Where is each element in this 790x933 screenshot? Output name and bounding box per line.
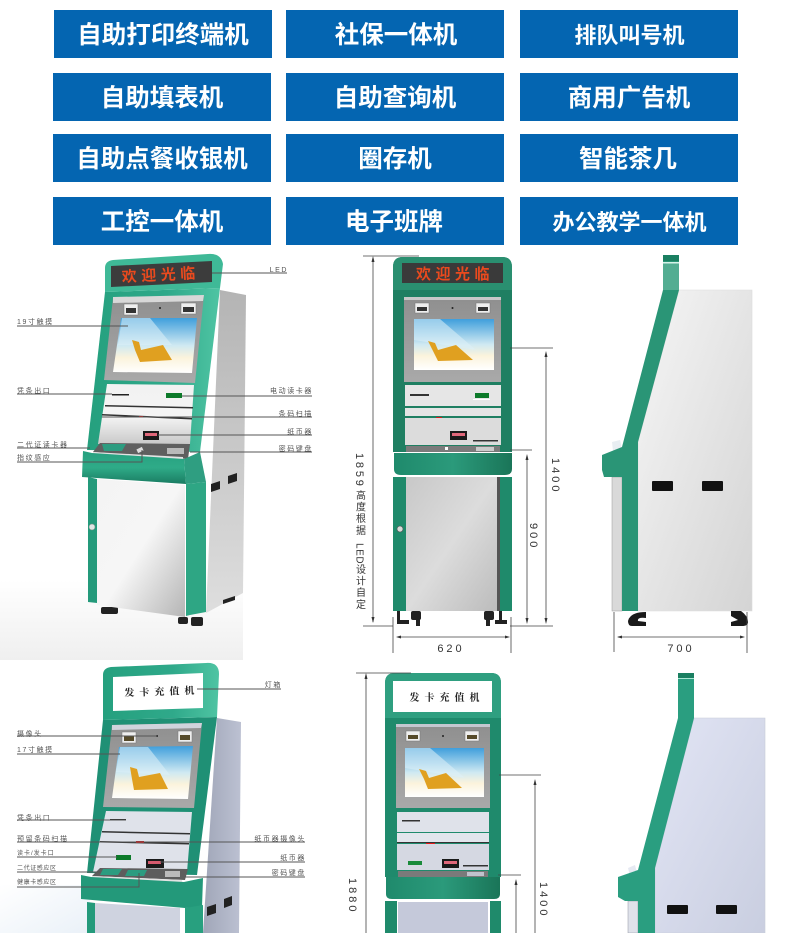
label: LED: LED	[270, 267, 288, 274]
dimension: overall height 1859: 1859	[353, 453, 365, 489]
button: 电子班牌: 电子班牌	[345, 208, 443, 236]
label: 指纹感应: 指纹感应	[17, 453, 51, 462]
right post	[185, 905, 203, 933]
right post	[498, 477, 512, 611]
card reader	[166, 393, 182, 398]
label: 纸币器: 纸币器	[280, 853, 306, 862]
top bar of bezel	[113, 295, 204, 303]
screen bezel	[104, 295, 204, 383]
divider bars	[100, 831, 190, 844]
dimension: overall height 1859: 高度根据	[354, 489, 366, 537]
label: 二代证感应区	[17, 864, 100, 872]
button: 排队叫号机: 排队叫号机	[574, 23, 685, 48]
right post	[490, 901, 501, 933]
button: 商用广告机	[520, 73, 738, 121]
button: 自助查询机: 自助查询机	[334, 84, 457, 112]
label: 预留条码扫描: 预留条码扫描	[17, 834, 69, 843]
label: 纸币器摄像头: 纸币器摄像头	[254, 834, 306, 843]
button: 工控一体机: 工控一体机	[101, 208, 224, 236]
cash acceptor	[146, 859, 164, 868]
dimension: 900	[510, 450, 539, 624]
label: 密码键盘	[185, 868, 306, 877]
door edge	[497, 477, 500, 611]
floor shadow: lower photo	[0, 885, 90, 933]
label: 凭条出口: 凭条出口	[17, 386, 51, 395]
cap highlight	[663, 262, 679, 264]
kiosk B: front elevation	[385, 673, 501, 933]
cameras	[122, 731, 192, 743]
button: 自助填表机: 自助填表机	[101, 84, 224, 112]
side slots	[652, 481, 723, 491]
screen bezel	[396, 724, 490, 808]
dimension: 1400	[499, 775, 549, 933]
label: 健康卡感应区: 健康卡感应区	[17, 878, 57, 886]
label: 密码键盘	[190, 444, 313, 453]
feet	[628, 611, 748, 626]
floor shadow: upper photo	[0, 580, 243, 660]
rear panel	[655, 718, 765, 933]
LED header	[105, 254, 223, 292]
label: 纸币器: 纸币器	[287, 427, 313, 436]
label: 读卡/发卡口	[17, 849, 117, 857]
label: 摄像头	[17, 729, 157, 738]
cash acceptor	[143, 431, 159, 440]
sign panel: 发卡充值机	[124, 684, 200, 699]
scanner panel	[397, 833, 489, 844]
cap highlight	[678, 678, 694, 679]
LED display: 欢迎光临	[416, 265, 494, 283]
door	[97, 479, 185, 617]
label: 凭条出口: 凭条出口	[17, 813, 51, 822]
bezel top bar	[396, 724, 490, 727]
label: 电动读卡器: 电动读卡器	[270, 386, 313, 395]
door	[398, 902, 488, 933]
red scanner	[139, 416, 143, 418]
lower frame left post	[88, 477, 97, 603]
button: 办公教学一体机: 办公教学一体机	[552, 210, 707, 235]
dimension: 1400: 1400	[537, 882, 549, 918]
screen bezel	[103, 723, 202, 808]
label: 预留条码扫描	[17, 834, 144, 843]
side panel	[206, 290, 246, 613]
header cap	[678, 673, 694, 678]
dimension: depth 700	[614, 612, 747, 655]
label: 密码键盘: 密码键盘	[279, 444, 313, 453]
header tint	[385, 673, 501, 718]
body frame	[87, 288, 220, 452]
button: 自助点餐收银机: 自助点餐收银机	[76, 145, 248, 173]
label: 二代证感应区: 二代证感应区	[17, 864, 57, 872]
button: 智能茶几	[520, 134, 738, 182]
label: 凭条出口	[17, 813, 126, 822]
dimensions: kiosk A front	[353, 256, 561, 655]
dimension: 900: 900	[527, 523, 539, 550]
control panel	[93, 811, 192, 872]
receipt slot	[112, 394, 129, 396]
kiosk B: perspective view	[81, 663, 241, 933]
header cap	[663, 255, 679, 261]
side slots	[667, 905, 737, 914]
header	[103, 663, 219, 720]
callouts: kiosk A	[17, 267, 313, 462]
label: 摄像头: 摄像头	[17, 729, 43, 738]
label: 读卡/发卡口: 读卡/发卡口	[17, 849, 55, 857]
header upper tint	[663, 262, 679, 290]
label: 指纹感应	[17, 450, 142, 462]
side panel	[203, 718, 241, 933]
touch screen	[405, 748, 484, 797]
receipt slot	[110, 819, 126, 820]
rear panel	[638, 290, 752, 611]
side slots	[207, 896, 232, 916]
label: 二代证读卡器: 二代证读卡器	[17, 440, 69, 449]
bezel top bar	[112, 723, 202, 730]
shelf	[81, 875, 203, 908]
green profile	[618, 673, 694, 933]
label: 凭条出口	[17, 386, 112, 395]
lower control panel	[98, 384, 194, 444]
feet	[397, 611, 507, 626]
dimension: overall height 1880	[346, 673, 411, 933]
label: 二代证读卡器	[17, 440, 90, 449]
dimension: overall height 1859: LED	[354, 543, 364, 564]
door edge	[612, 477, 622, 611]
kiosk A: side elevation	[602, 255, 752, 626]
touch screen	[113, 318, 197, 373]
button: 社保一体机	[286, 10, 504, 58]
sign panel	[393, 681, 492, 712]
label: 17寸触摸: 17寸触摸	[17, 745, 54, 754]
button: 商用广告机: 商用广告机	[568, 84, 691, 112]
screen bezel	[404, 297, 501, 382]
label: 19寸触摸: 19寸触摸	[17, 317, 54, 326]
label: LED	[212, 267, 288, 274]
shelf	[386, 877, 500, 899]
kiosk A: perspective view	[82, 254, 246, 626]
door	[406, 477, 497, 611]
button: 工控一体机	[53, 197, 271, 245]
label: 19寸触摸	[17, 317, 128, 326]
divider bar	[397, 842, 489, 843]
label: 17寸触摸	[17, 745, 120, 754]
button: 自助打印终端机	[54, 10, 272, 58]
left post	[393, 477, 406, 611]
button: 电子班牌	[286, 197, 504, 245]
red scanner	[136, 841, 144, 843]
counter strip	[398, 871, 488, 877]
cash panel	[397, 844, 489, 870]
dimension: 1400	[510, 348, 561, 626]
cabinet frame	[385, 673, 501, 877]
bezel top bar	[404, 297, 501, 300]
button: 自助填表机	[53, 73, 271, 121]
touch screen	[414, 319, 494, 370]
touch screen	[112, 746, 193, 799]
button: 排队叫号机	[520, 10, 738, 58]
sign panel	[113, 673, 203, 711]
shelf side	[184, 452, 206, 484]
button: 自助点餐收银机	[53, 134, 271, 182]
cameras	[406, 731, 479, 741]
LED display	[402, 263, 503, 283]
cabinet frame	[393, 257, 512, 452]
dimension: overall height 1859: 设计自定	[354, 564, 366, 611]
counter	[92, 868, 188, 882]
door edge	[628, 901, 638, 933]
shelf	[394, 453, 512, 475]
dimension: overall height 1859	[353, 256, 419, 626]
label: 健康卡感应区	[17, 873, 139, 887]
cash panel	[405, 418, 501, 445]
label: 条码扫描: 条码扫描	[279, 409, 313, 418]
kiosk B: side elevation	[618, 673, 765, 933]
LED display	[111, 261, 212, 287]
receipt paper	[612, 440, 622, 451]
panel divider bars	[102, 405, 193, 420]
card reader	[116, 855, 131, 860]
button: 办公教学一体机	[520, 197, 738, 245]
dimension: 900 leader	[498, 875, 521, 933]
dimension: depth 700: 700	[667, 643, 695, 655]
receipt and card panel	[405, 385, 501, 406]
button: 自助打印终端机: 自助打印终端机	[77, 21, 249, 49]
label: 灯箱: 灯箱	[265, 680, 282, 689]
label: 密码键盘: 密码键盘	[272, 868, 306, 877]
left post	[87, 902, 95, 933]
scanner panel	[405, 408, 501, 418]
feet	[101, 596, 235, 626]
callouts: kiosk B	[17, 680, 306, 887]
button: 社保一体机: 社保一体机	[335, 21, 458, 49]
dimension: width 620: 620	[437, 643, 465, 655]
cameras	[124, 303, 196, 315]
dimension: width 620	[393, 617, 511, 655]
sign panel: 发卡充值机	[410, 691, 484, 704]
counter strip	[406, 446, 500, 452]
shelf	[82, 451, 186, 484]
label: 灯箱	[197, 680, 282, 689]
LED display: 欢迎光临	[121, 264, 200, 286]
label: 电动读卡器	[182, 386, 313, 396]
left post	[385, 901, 397, 933]
lock	[89, 524, 95, 530]
cameras	[415, 303, 490, 313]
button: 智能茶几: 智能茶几	[579, 145, 677, 173]
lower frame right post	[186, 482, 206, 616]
side ventilation slots	[211, 473, 237, 492]
dimension: 1400: 1400	[549, 458, 561, 494]
kiosk A: front elevation	[393, 257, 512, 626]
receipt panel	[397, 812, 489, 832]
lock	[397, 526, 403, 532]
button: 自助查询机	[286, 73, 504, 121]
dimension: overall height 1880: 1880	[346, 878, 358, 914]
header tint	[393, 257, 512, 290]
button: 圈存机: 圈存机	[358, 145, 432, 173]
green profile	[602, 255, 679, 611]
door	[95, 903, 180, 933]
category buttons	[53, 10, 738, 245]
counter with keypad	[93, 443, 190, 459]
body frame	[87, 717, 217, 875]
dimensions: kiosk B front	[346, 673, 549, 933]
receipt paper	[628, 865, 637, 876]
button: 圈存机	[286, 134, 504, 182]
